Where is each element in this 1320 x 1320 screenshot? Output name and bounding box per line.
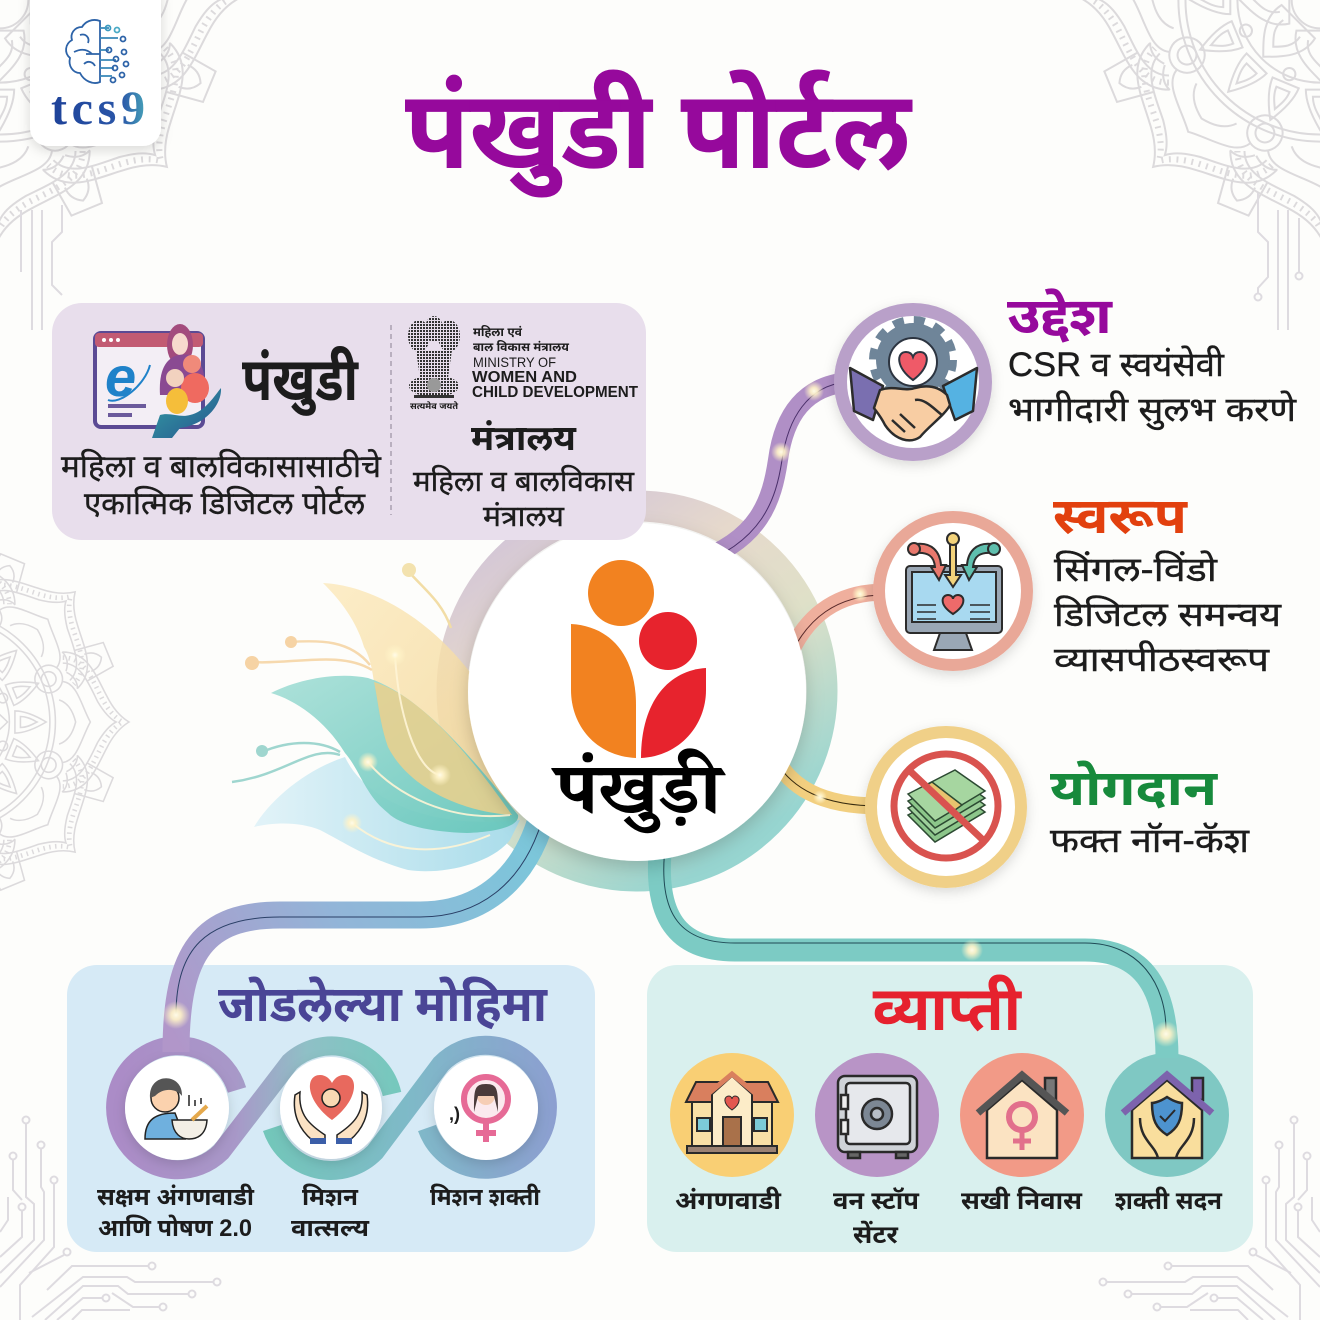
panel: coverage	[647, 965, 1253, 1252]
text: ministry identity: WOMEN AND	[472, 369, 577, 386]
node: saksham anganwadi	[125, 1056, 229, 1160]
label	[291, 1183, 370, 1242]
label	[97, 1183, 255, 1242]
node: mission vatsalya	[280, 1057, 382, 1159]
connector: to contribution	[770, 745, 880, 806]
panel: portal and ministry	[52, 303, 646, 540]
text: pankhudi: पंखुडी	[242, 346, 359, 417]
teal petal	[271, 676, 518, 833]
icon: gear with heart	[873, 320, 953, 400]
node: anganwadi	[670, 1053, 794, 1177]
panel: linked campaigns	[67, 965, 595, 1252]
node: objective icon	[834, 303, 992, 461]
text block: objective: भागीदारी सुलभ करणे	[1008, 390, 1298, 430]
node: shakti sadan	[1105, 1053, 1229, 1177]
decorative lotus petals	[232, 563, 520, 871]
text: satyamev jayate: सत्यमेव जयते	[410, 399, 458, 411]
text block: form: सिंगल-विंडो	[1054, 550, 1218, 589]
glow lines	[352, 655, 510, 849]
heading: व्याप्ती	[872, 974, 1023, 1044]
tendrils	[232, 572, 451, 782]
icon: portal browser and family: e	[105, 345, 136, 408]
text block: form	[1053, 488, 1282, 679]
icon: handshake	[850, 368, 977, 440]
logo mark: orange and red petals	[571, 560, 706, 758]
node: sakhi niwas	[960, 1053, 1084, 1177]
icon: national emblem	[408, 316, 460, 398]
text block: contribution: योगदान	[1050, 760, 1218, 816]
icon: brain circuit	[66, 20, 128, 83]
text block: form: व्यासपीठस्वरूप	[1054, 641, 1270, 679]
yellow overlay	[374, 682, 512, 815]
connector: to linked campaigns	[162, 805, 545, 1052]
text: portal description	[61, 449, 382, 521]
text block: contribution: फक्त नॉन-कॅश	[1050, 822, 1250, 860]
text block: form: स्वरूप	[1053, 488, 1188, 544]
text: tcs9: tcs9	[51, 82, 145, 135]
logo text: पंखुड़ी	[551, 748, 726, 834]
text: ministry name	[413, 465, 635, 533]
text: ministry identity: MINISTRY OF	[473, 354, 556, 370]
text: ministry heading: मंत्रालय	[471, 419, 577, 458]
text block: objective	[1007, 288, 1298, 430]
heading: जोडलेल्या मोहिमा	[218, 976, 548, 1032]
text block: form: डिजिटल समन्वय	[1054, 596, 1282, 634]
mandala: left middle	[0, 533, 134, 911]
ribbon: wave	[116, 1045, 547, 1170]
node: form icon	[873, 511, 1033, 671]
circuit lines: bottom left corner	[0, 1116, 220, 1320]
label: आणि पोषण 2.0	[98, 1214, 252, 1242]
central logo disc: pankhudi	[468, 523, 806, 861]
text: ministry identity	[472, 324, 638, 401]
text: ministry identity: बाल विकास मंत्रालय	[473, 339, 569, 354]
connector: to coverage	[659, 835, 1179, 1058]
text: ministry identity: महिला एवं	[473, 324, 523, 339]
label: मिशन शक्ती	[430, 1183, 541, 1211]
mandala: top right corner	[1078, 0, 1320, 330]
text: ministry name: महिला व बालविकास	[413, 465, 635, 498]
label: वन स्टॉप	[833, 1186, 920, 1215]
node: one stop centre	[815, 1053, 939, 1177]
text: portal description: महिला व बालविकासासाठीचे	[61, 449, 382, 484]
circuit lines: bottom right corner	[1100, 1116, 1320, 1320]
blue petal	[254, 757, 520, 871]
node: mission shakti	[434, 1056, 538, 1160]
label: मिशन	[302, 1183, 359, 1211]
icon: monitor with arrows	[906, 533, 1002, 650]
logo card: tcs9	[30, 0, 161, 146]
central ring	[452, 506, 822, 876]
icon: cash prohibited	[894, 754, 998, 858]
node: mission shakti: ,)	[449, 1104, 460, 1124]
text: ministry name: मंत्रालय	[483, 501, 565, 533]
text: portal description: एकात्मिक डिजिटल पोर्टल	[84, 486, 366, 521]
text block: contribution	[1050, 760, 1250, 860]
connector: to objective	[695, 381, 850, 566]
label: सक्षम अंगणवाडी	[97, 1183, 255, 1211]
label: वात्सल्य	[291, 1215, 370, 1242]
label: शक्ती सदन	[1115, 1186, 1223, 1215]
label: सखी निवास	[961, 1186, 1083, 1215]
text: ministry identity: CHILD DEVELOPMENT	[472, 384, 638, 401]
text block: objective: CSR व स्वयंसेवी	[1008, 345, 1225, 384]
label	[833, 1186, 920, 1249]
label: सेंटर	[853, 1220, 899, 1249]
node: contribution icon	[865, 726, 1027, 888]
mandala: top left corner	[0, 0, 242, 330]
icon: portal browser and family	[95, 324, 221, 438]
connector: to form	[785, 586, 885, 668]
text block: objective: उद्देश	[1007, 288, 1113, 344]
title: पंखुडी पोर्टल	[405, 69, 913, 199]
yellow petal	[323, 583, 512, 815]
label: अंगणवाडी	[675, 1186, 782, 1215]
